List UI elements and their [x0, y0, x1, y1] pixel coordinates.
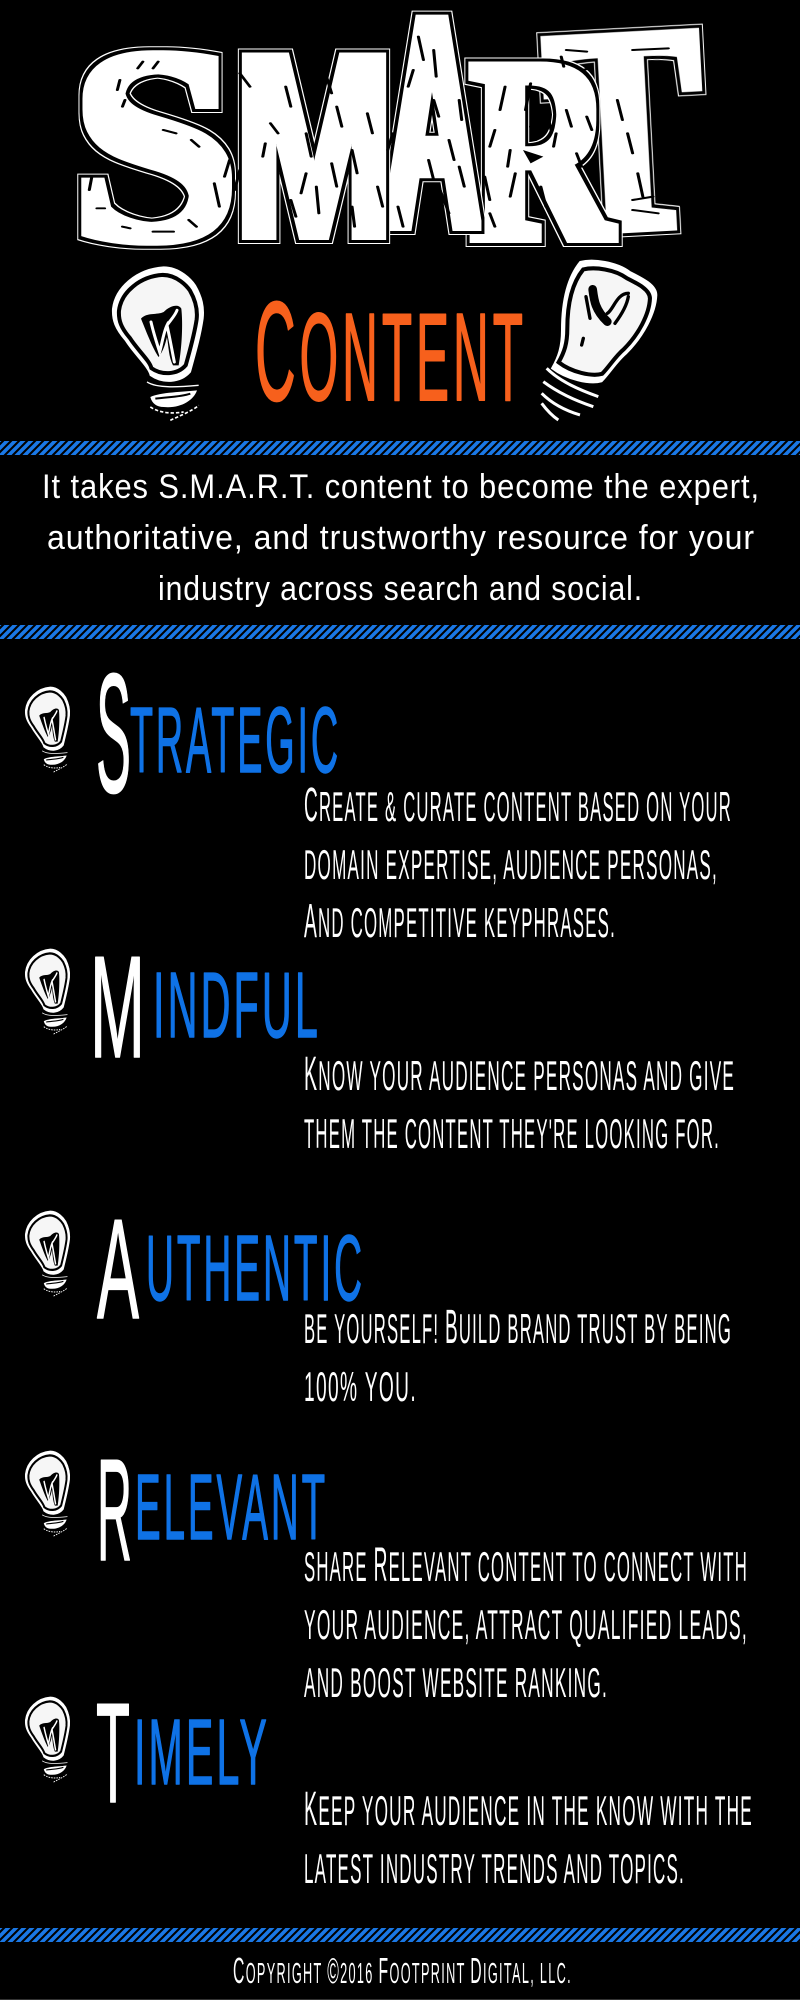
body text [304, 1539, 748, 1706]
title: SMART: M [234, 1, 394, 290]
heading: Strategic [96, 639, 341, 829]
heading: Mindful: M [90, 926, 145, 1088]
divider band: bottom [0, 1928, 800, 1942]
copyright footer: COPYRIGHT ©2016 FOOTPRINT DIGITAL, LLC. [233, 1950, 572, 1991]
heading: Mindful [90, 926, 321, 1088]
title: SMART: S [70, 0, 240, 298]
body text: 100% YOU. [304, 1363, 417, 1410]
heading: Relevant [97, 1429, 328, 1591]
section: Mindful [25, 926, 735, 1157]
divider band: top [0, 441, 800, 455]
section: Timely [25, 1674, 753, 1892]
section: Mindful: INDFUL [153, 953, 321, 1057]
divider band: middle [0, 625, 800, 639]
section: Timely: IMELY [134, 1700, 270, 1804]
intro text: industry across search and social. [158, 570, 643, 608]
section: Relevant: ELEVANT [135, 1455, 328, 1559]
icon: bulb [25, 949, 70, 1034]
body text [304, 779, 732, 948]
icon: bulb [25, 687, 70, 772]
icon: left light bulb [113, 267, 203, 420]
section: Strategic [25, 639, 732, 948]
heading: Timely: T [96, 1674, 130, 1833]
section: Strategic: TRATEGIC [130, 688, 341, 792]
section: Authentic: UTHENTIC [146, 1216, 365, 1320]
icon: bulb [25, 1211, 70, 1296]
section: Relevant [25, 1429, 748, 1706]
body text [304, 1048, 735, 1157]
title: SMART: R [470, 5, 614, 295]
title texture [89, 37, 686, 232]
heading: Relevant: R [97, 1429, 132, 1591]
body text [304, 1783, 753, 1892]
body text [304, 1301, 732, 1410]
section: Authentic [25, 1190, 732, 1410]
heading: Authentic [97, 1190, 365, 1349]
heading: Authentic: A [97, 1190, 139, 1349]
icon: bulb [25, 1451, 70, 1536]
intro text: authoritative, and trustworthy resource for your [47, 519, 755, 557]
icon: right light bulb [542, 260, 657, 420]
heading: Strategic: S [96, 639, 131, 829]
heading: Timely [96, 1674, 270, 1833]
intro text [42, 468, 760, 608]
icon: bulb [25, 1697, 70, 1782]
title: SMART [70, 0, 711, 298]
